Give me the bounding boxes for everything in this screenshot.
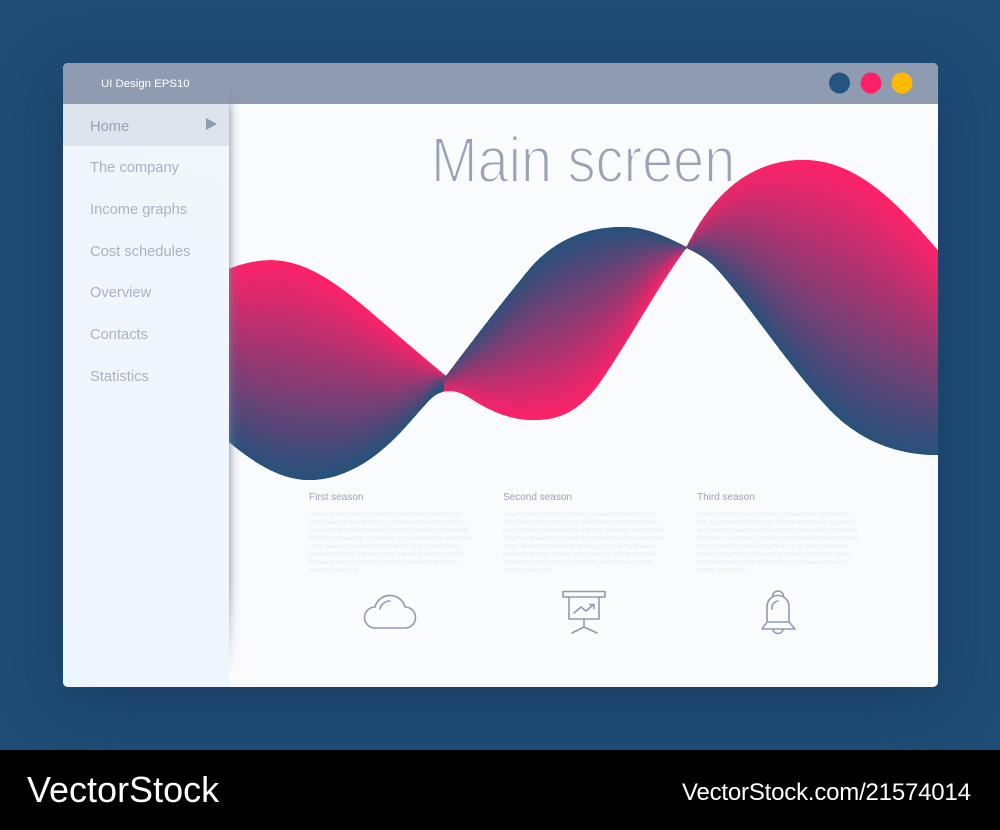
menu item: Statistics: Statistics (90, 369, 149, 385)
text block: Third season: platea dictumst. Pvitae porta mauris tincidunt. Nulla (697, 551, 850, 558)
heading: Second season: Second season (503, 492, 572, 502)
text block: First season: elit. Etiam vel porta turpis. Vestibulum lorem dapibus (309, 519, 466, 526)
text block: Third season: sem at nulla pellentesque lobortis. Aenean consequat (697, 527, 857, 534)
text block: First season: platea dictumst. Pvitae porta mauris tincidunt. Nulla (309, 551, 462, 558)
window control dots (829, 72, 912, 94)
title: Main screen: Main screen (431, 124, 735, 196)
text block: First season: mattis. Nulla pro (309, 567, 358, 574)
footer url text: VectorStock.com/21574014 (682, 779, 971, 806)
active menu row: Home (63, 104, 229, 146)
text block: Third season: mattis. Nulla pro (697, 567, 746, 574)
text block: First season: tincidunt tellus eget nisi pretium, vel laoreet metus (309, 559, 458, 566)
text block: Second season (503, 511, 664, 574)
icon: presentation board (562, 590, 606, 634)
menu item: Overview: Overview (90, 285, 151, 301)
title bar (63, 63, 938, 104)
text block: First season: fringilla consequat. Curabitur sit pellentesque vehicula (309, 535, 470, 542)
header label: UI Design EPS10 (101, 78, 190, 90)
text block: Third season (697, 511, 858, 574)
icon: cloud (364, 594, 416, 629)
menu item: The company: The company (90, 160, 179, 176)
icon: play arrow (206, 118, 217, 130)
heading: Third season: Third season (697, 492, 755, 502)
text block: Second season: tincidunt tellus eget nisi pretium, vel laoreet metus (503, 559, 652, 566)
footer: watermark bar (0, 750, 1000, 830)
menu item: Contacts: Contacts (90, 327, 148, 343)
text block: Third season: tincidunt tellus eget nisi pretium, vel laoreet metus (697, 559, 846, 566)
text block: Second season: mattis. Nulla pro (503, 567, 552, 574)
menu item: Income graphs: Income graphs (90, 202, 187, 218)
text block: Third season: fringilla consequat. Curabitur sit pellentesque vehicula (697, 535, 858, 542)
text block: First season: Lorem ipsum dolor sit amet, consectetur adipiscing (309, 511, 461, 518)
chart: gradient wave ribbon (229, 160, 938, 480)
text block: Third season: urna, laoreet condimentum lacus. In hac habitasse (697, 543, 848, 550)
text block: Third season: elit. Etiam vel porta turpis. Vestibulum lorem dapibus (697, 519, 854, 526)
text block: First season: sem at nulla pellentesque lobortis. Aenean consequat (309, 527, 469, 534)
text block: Second season: elit. Etiam vel porta turpis. Vestibulum lorem dapibus (503, 519, 660, 526)
text block: Third season: Lorem ipsum dolor sit amet, consectetur adipiscing (697, 511, 849, 518)
heading: First season: First season (309, 492, 363, 502)
menu item: Home: Home (90, 119, 129, 135)
text block: Second season: sem at nulla pellentesque lobortis. Aenean consequat (503, 527, 663, 534)
menu item: Cost schedules: Cost schedules (90, 244, 190, 260)
text block: Second season: fringilla consequat. Curabitur sit pellentesque vehicula (503, 535, 664, 542)
panel: sidebar menu (63, 104, 229, 687)
icon: bell (761, 590, 796, 634)
text block: First season (309, 511, 470, 574)
text block: Second season: urna, laoreet condimentum lacus. In hac habitasse (503, 543, 654, 550)
sidebar shadow (229, 103, 238, 663)
background and window shadow (63, 63, 938, 687)
text block: Second season: Lorem ipsum dolor sit amet, consectetur adipiscing (503, 511, 655, 518)
text block: Second season: platea dictumst. Pvitae porta mauris tincidunt. Nulla (503, 551, 656, 558)
text block: First season: urna, laoreet condimentum lacus. In hac habitasse (309, 543, 460, 550)
footer logo text: VectorStock (27, 769, 219, 810)
